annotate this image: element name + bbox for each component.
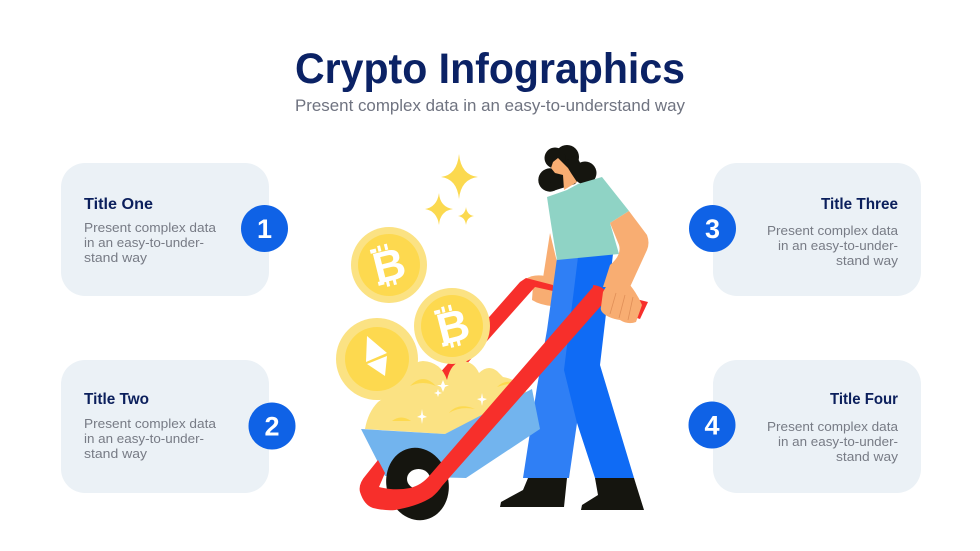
title: Crypto Infographics: [295, 45, 685, 93]
panel: title three: Present complex data: [767, 223, 899, 238]
illustration: wheelbarrow handle and frame: [360, 285, 607, 510]
hair: [538, 145, 596, 192]
panel: title two: 2: [264, 412, 280, 442]
illustration: left hand and arm: [526, 233, 557, 306]
front leg: [564, 254, 634, 478]
panel: title four: 4: [704, 410, 720, 440]
panel: title three: Title Three: [821, 196, 898, 213]
panel: title one: in an easy-to-under-: [84, 235, 204, 250]
icon: bitcoin coin 2: B: [432, 300, 475, 355]
panel: title four: Title Four: [830, 391, 898, 408]
icon: sparkles: [425, 154, 478, 225]
illustration: handle grip: [600, 290, 648, 319]
panel: title one: Present complex data: [84, 220, 217, 235]
panel: title three: in an easy-to-under-: [778, 238, 898, 253]
panel: title four: Present complex data: [767, 419, 899, 434]
panel: title one: stand way: [84, 250, 148, 265]
icon: bitcoin coin 2: [414, 288, 490, 364]
illustration: person: [500, 145, 648, 510]
back leg: [523, 256, 583, 478]
panel: title two: in an easy-to-under-: [84, 431, 204, 446]
icon: ethereum coin: [336, 318, 418, 400]
panel: title four: stand way: [836, 449, 899, 464]
panel: title one: 1: [257, 214, 272, 244]
illustration: wheelbarrow tray: [361, 389, 540, 478]
panel: title one: Title One: [84, 196, 153, 213]
illustration: wheelbarrow back arm: [438, 278, 553, 385]
shoes: [500, 478, 567, 507]
panel: title three: 3: [705, 214, 720, 244]
panel: title three: stand way: [836, 253, 899, 268]
panel: title two: [61, 360, 296, 493]
sparkles on the pile: [417, 380, 487, 424]
subtitle: Present complex data in an easy-to-understand way: [295, 96, 685, 115]
panel: title two: stand way: [84, 446, 148, 461]
panel: title four: in an easy-to-under-: [778, 434, 898, 449]
icon: bitcoin coin 1: B: [368, 239, 411, 294]
panel: title four: [688, 360, 921, 493]
panel: title two: Title Two: [84, 391, 149, 408]
face and neck: [551, 158, 577, 190]
illustration: wheel: [379, 441, 456, 527]
shirt: [547, 177, 629, 260]
panel: title two: Present complex data: [84, 416, 217, 431]
panel: title three: [689, 163, 921, 296]
panel: title one: [61, 163, 288, 296]
icon: bitcoin coin 1: [351, 227, 427, 303]
right arm: [603, 211, 648, 287]
illustration: right hand: [601, 285, 642, 323]
illustration: gold pile: [365, 361, 527, 434]
